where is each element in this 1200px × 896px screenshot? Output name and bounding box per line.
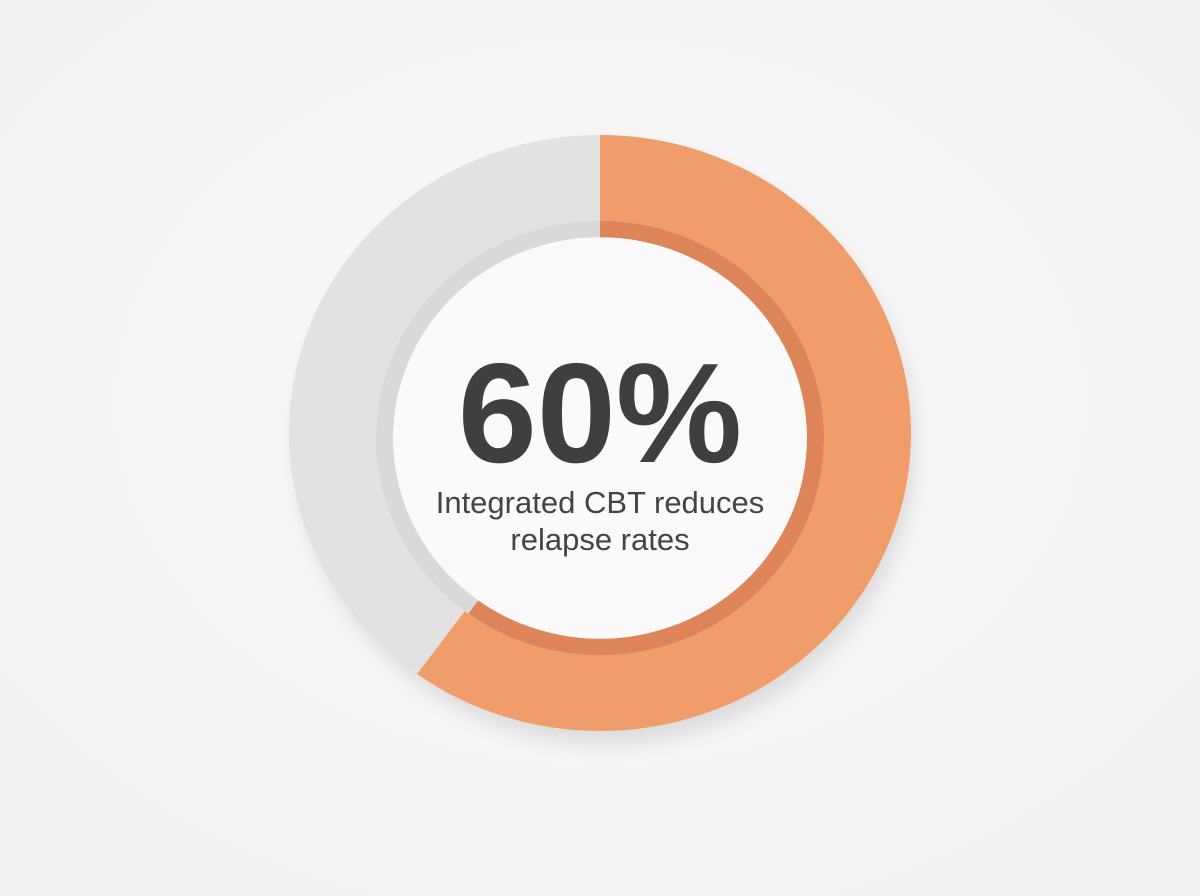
- caption: [436, 485, 764, 557]
- orange segment 60%: [334, 178, 866, 688]
- caption: Integrated CBT reduces: [436, 485, 764, 520]
- caption: relapse rates: [510, 522, 690, 557]
- big percentage: 60%: [458, 334, 742, 493]
- inner bevel: [376, 221, 824, 655]
- donut ring: [296, 148, 916, 744]
